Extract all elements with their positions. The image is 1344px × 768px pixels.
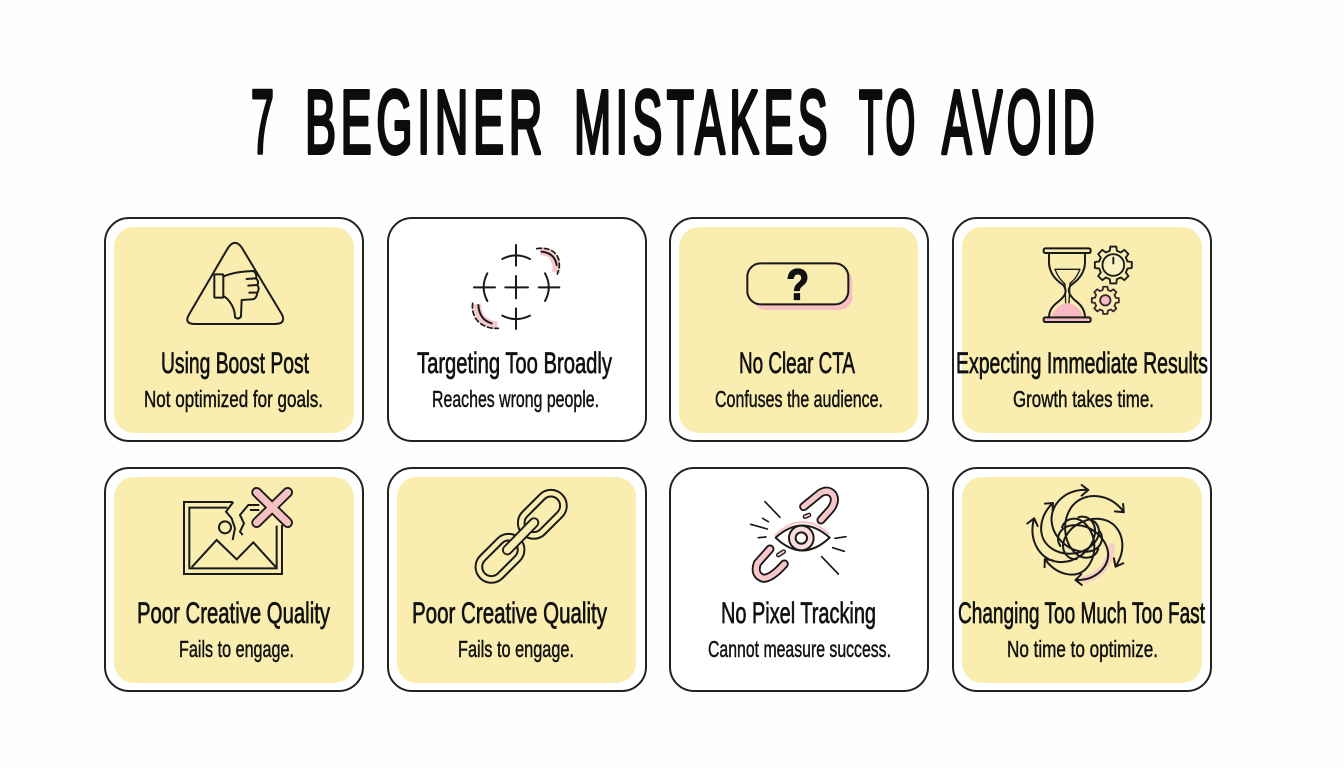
icon: hourglass and gears bbox=[1044, 247, 1132, 322]
title: BEGINER bbox=[305, 73, 547, 173]
heading: No Pixel Tracking bbox=[721, 597, 876, 630]
description: No time to optimize. bbox=[1007, 636, 1158, 662]
description: Fails to engage. bbox=[458, 636, 574, 662]
icon: swirling arrows bbox=[1020, 480, 1137, 589]
description: Cannot measure success. bbox=[708, 636, 891, 662]
panel: poor creative quality, broken image bbox=[105, 468, 363, 691]
heading: Poor Creative Quality bbox=[412, 597, 607, 630]
icon: chain link bbox=[469, 483, 573, 589]
heading: Changing Too Much Too Fast bbox=[958, 597, 1205, 630]
heading: Using Boost Post bbox=[161, 347, 309, 380]
description: Growth takes time. bbox=[1013, 386, 1154, 412]
description: Not optimized for goals. bbox=[144, 386, 323, 412]
description: Fails to engage. bbox=[179, 636, 294, 662]
heading: Expecting Immediate Results bbox=[956, 347, 1208, 380]
icon: button with question mark: ? bbox=[786, 261, 809, 310]
icon: scattered target reticle bbox=[472, 245, 559, 329]
panel: poor creative quality, chain link bbox=[388, 468, 646, 691]
title: MISTAKES bbox=[574, 73, 832, 173]
panel: no pixel tracking bbox=[670, 468, 928, 691]
heading: Poor Creative Quality bbox=[137, 597, 330, 630]
heading: Targeting Too Broadly bbox=[417, 347, 612, 380]
panel: targeting too broadly bbox=[388, 218, 646, 441]
panel: changing too much too fast bbox=[953, 468, 1211, 691]
title: TO bbox=[859, 73, 919, 173]
icon: thumbs down in triangle bbox=[187, 243, 283, 324]
text: AVOID bbox=[942, 73, 1099, 173]
description: Confuses the audience. bbox=[715, 386, 883, 412]
title: 7 bbox=[251, 73, 278, 173]
panel: using boost post bbox=[105, 218, 363, 441]
icon: broken image with cross bbox=[184, 492, 288, 574]
panel: no clear cta bbox=[670, 218, 928, 441]
icon: button with question mark bbox=[747, 261, 852, 310]
heading: No Clear CTA bbox=[739, 347, 855, 380]
panel: expecting immediate results bbox=[953, 218, 1211, 441]
description: Reaches wrong people. bbox=[432, 386, 599, 412]
icon: eye over broken link bbox=[751, 491, 846, 578]
